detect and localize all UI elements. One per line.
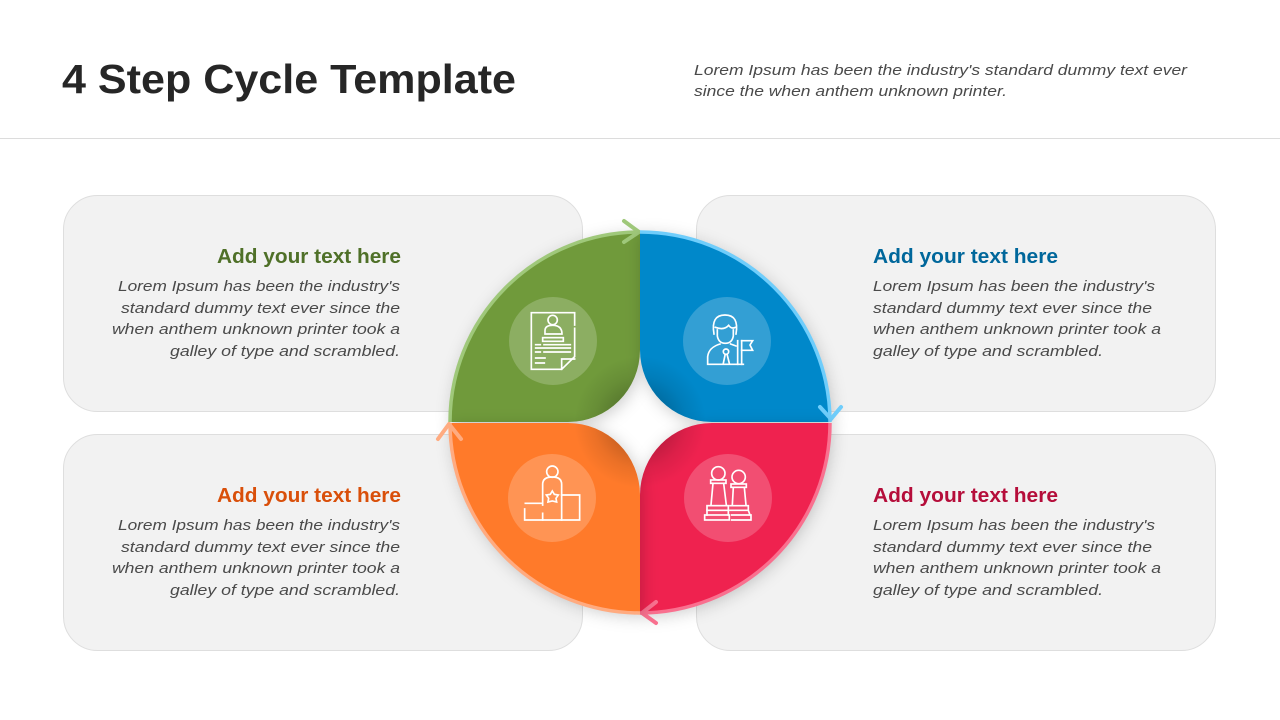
text block: bottom right: standard dummy text ever since the xyxy=(873,539,1152,556)
text block: top left: Lorem Ipsum has been the industry's xyxy=(118,278,401,295)
text block: bottom right xyxy=(873,517,1161,599)
text block: top left: when anthem unknown printer took a xyxy=(112,321,400,338)
text block: top left: standard dummy text ever since the xyxy=(121,300,400,317)
cycle segment: orange xyxy=(438,423,640,614)
arrow: red xyxy=(642,602,656,623)
panel: top left xyxy=(64,196,582,412)
heading: bottom right: Add your text here xyxy=(873,484,1058,507)
text block: top right: when anthem unknown printer took a xyxy=(873,321,1161,338)
arrow: blue xyxy=(820,407,841,419)
heading: top left: Add your text here xyxy=(217,245,401,268)
text block: top right: standard dummy text ever since the xyxy=(873,300,1152,317)
text block: bottom right: when anthem unknown printer took a xyxy=(873,560,1161,577)
cycle segment: blue xyxy=(640,232,841,422)
header description: Lorem Ipsum has been the industry's standard dummy text ever xyxy=(694,62,1188,79)
icon: person with flag xyxy=(683,297,771,385)
icon: chess pawns xyxy=(684,454,772,542)
text block: bottom left xyxy=(112,517,401,599)
cycle segment: red xyxy=(640,423,830,623)
header description xyxy=(694,62,1188,100)
text block: bottom left: standard dummy text ever since the xyxy=(121,539,400,556)
icon: podium xyxy=(508,454,596,542)
text block: bottom left: when anthem unknown printer took a xyxy=(112,560,400,577)
text block: bottom left: Lorem Ipsum has been the industry's xyxy=(118,517,401,534)
text block: top right: Lorem Ipsum has been the industry's xyxy=(873,278,1156,295)
title: 4 Step Cycle Template xyxy=(62,56,516,102)
arrow: orange xyxy=(438,424,461,439)
heading: bottom left: Add your text here xyxy=(217,484,401,507)
icon: resume document xyxy=(509,297,597,385)
text block: bottom right: galley of type and scrambled. xyxy=(873,582,1103,599)
text block: bottom right: Lorem Ipsum has been the industry's xyxy=(873,517,1156,534)
arrow: green xyxy=(624,221,639,242)
heading: top right: Add your text here xyxy=(873,245,1058,268)
panel: top right xyxy=(696,196,1216,412)
panel: bottom right xyxy=(696,434,1216,650)
panel: bottom left xyxy=(64,434,582,650)
text block: top left: galley of type and scrambled. xyxy=(170,343,400,360)
text block: top right xyxy=(873,278,1161,360)
text block: bottom left: galley of type and scrambled. xyxy=(170,582,400,599)
text block: top left xyxy=(112,278,401,360)
header description: since the when anthem unknown printer. xyxy=(694,83,1007,100)
text block: top right: galley of type and scrambled. xyxy=(873,343,1103,360)
cycle segment: green xyxy=(450,221,640,422)
